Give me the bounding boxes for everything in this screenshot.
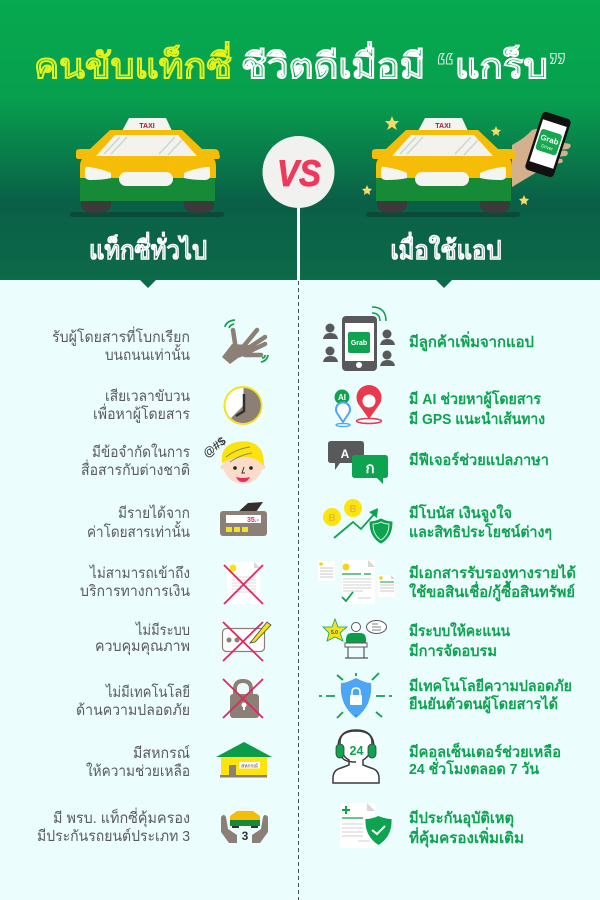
icon: taxi with app, right: Driver <box>541 143 554 152</box>
row 8 right text: มีคอลเซ็นเตอร์ช่วยเหลือ <box>409 742 561 761</box>
row 9 left text: มีประกันรถยนต์ประเภท 3 <box>37 828 190 845</box>
row 3 left text <box>81 443 190 479</box>
icon: foreign passenger face <box>200 434 266 484</box>
row 8 left text: ให้ความช่วยเหลือ <box>86 762 190 780</box>
row 5 left text: ไม่สามารถเข้าถึง <box>89 564 190 582</box>
icon: rating star and trainer: 5.0 <box>331 630 338 636</box>
row 2 right text: มี GPS แนะนำเส้นทาง <box>409 411 545 428</box>
row 6 left text: ควบคุมคุณภาพ <box>95 638 190 656</box>
row 9 right text: มีประกันอุบัติเหตุ <box>409 809 514 828</box>
VS badge <box>262 136 334 280</box>
row 5 right text <box>409 563 576 602</box>
row 5 left text <box>80 564 190 600</box>
row 7 right text: มีเทคโนโลยีความปลอดภัย <box>409 676 572 695</box>
row 4 left text: ค่าโดยสารเท่านั้น <box>87 521 190 541</box>
VS badge: VS <box>277 153 321 194</box>
title <box>34 41 567 86</box>
icon: phone with passengers <box>323 307 395 371</box>
row 1 left text <box>52 326 190 364</box>
row 8 right text <box>409 742 561 778</box>
icon: taxi with app, right <box>362 111 572 217</box>
icon: crossed-out padlock <box>223 679 263 718</box>
icon: bonus coins, growth arrow and shield: B <box>328 513 336 524</box>
icon: rating star and trainer <box>323 619 386 658</box>
icon: taxi with app, right: TAXI <box>435 123 451 130</box>
icon: foreign passenger face: @#$ <box>200 434 229 460</box>
icon: clock <box>224 387 262 424</box>
row 4 right text: และสิทธิประโยชน์ต่างๆ <box>409 522 552 541</box>
row 9 left text <box>37 807 190 845</box>
icon: income documents <box>318 560 395 604</box>
header panel <box>0 0 600 288</box>
icon: phone with passengers: Grab <box>351 340 367 347</box>
row 3 left text: มีข้อจำกัดในการ <box>92 443 190 461</box>
row 1 left text: บนถนนเท่านั้น <box>105 344 190 364</box>
icon: crossed-out document <box>224 562 263 604</box>
row 9 left text: มี พรบ. แท็กซี่คุ้มครอง <box>53 807 190 828</box>
row 4 left text <box>87 504 190 541</box>
row 9 right text: ที่คุ้มครองเพิ่มเติม <box>409 827 524 848</box>
row 3 right text: มีฟีเจอร์ช่วยแปลภาษา <box>409 451 549 469</box>
row 1 left text: รับผู้โดยสารที่โบกเรียก <box>52 326 190 346</box>
icon: taxi meter <box>220 502 267 536</box>
icon: hands protecting taxi <box>221 807 268 843</box>
row 5 right text: ใช้ขอสินเชื่อ/กู้ซื้อสินทรัพย์ <box>409 580 575 602</box>
title: ชีวิตดีเมื่อมี “แกร็บ” <box>241 41 567 86</box>
icon: bonus coins, growth arrow and shield: B <box>349 504 357 515</box>
icon: insurance document and shield <box>340 803 392 848</box>
heading: with the app: เมื่อใช้แอป <box>390 231 502 265</box>
row 7 left text: ด้านความปลอดภัย <box>76 702 190 719</box>
row 6 right text: มีระบบให้คะแนน <box>409 622 511 640</box>
row 6 left text <box>95 621 190 656</box>
icon: taxi meter: 35.- <box>247 517 260 524</box>
row 8 left text: มีสหกรณ์ <box>133 745 190 762</box>
icon: translation speech bubbles <box>328 441 388 484</box>
row 8 left text <box>86 745 190 780</box>
row 4 left text: มีรายได้จาก <box>118 504 190 522</box>
title: คนขับแท็กซี่ <box>34 41 232 86</box>
row 6 right text <box>409 622 511 660</box>
row 5 left text: บริการทางการเงิน <box>80 583 190 600</box>
icon: crossed-out rating card <box>222 622 271 661</box>
icon: hand waving <box>222 320 268 364</box>
row 4 right text: มีโบนัส เงินจูงใจ <box>409 503 512 523</box>
row 9 right text <box>409 809 524 848</box>
icon: taxi with app, right: Grab <box>539 133 560 147</box>
icon: AI and GPS pins <box>334 385 382 426</box>
row 2 left text <box>93 388 190 423</box>
icon: call-center agent <box>333 730 379 783</box>
row 8 right text: 24 ชั่วโมงตลอด 7 วัน <box>409 758 540 778</box>
row 5 right text: มีเอกสารรับรองทางรายได้ <box>409 563 576 582</box>
icon: translation speech bubbles: ก <box>365 460 375 477</box>
icon: call-center agent: 24 <box>350 744 363 758</box>
icon: cooperative building <box>216 742 272 778</box>
row 6 right text: มีการจัดอบรม <box>409 643 497 660</box>
row 2 right text <box>409 389 545 428</box>
row 7 left text: ไม่มีเทคโนโลยี <box>105 683 190 701</box>
row 7 left text <box>76 683 190 719</box>
icon: AI and GPS pins: AI <box>338 393 346 402</box>
heading: regular taxi: แท็กซี่ทั่วไป <box>89 231 207 265</box>
row 2 left text: เพื่อหาผู้โดยสาร <box>93 403 190 423</box>
row 4 right text <box>409 503 552 541</box>
icon: translation speech bubbles: A <box>341 447 350 461</box>
row 7 right text: ยืนยันตัวตนผู้โดยสารได้ <box>409 694 558 714</box>
row 3 left text: สื่อสารกับต่างชาติ <box>81 459 190 479</box>
row 1 right text: มีลูกค้าเพิ่มจากแอป <box>409 331 534 352</box>
center dashed divider <box>298 281 300 900</box>
icon: bonus coins, growth arrow and shield <box>323 499 392 543</box>
row 7 right text <box>409 676 572 714</box>
icon: taxi, left <box>70 118 224 217</box>
icon: taxi, left: TAXI <box>139 123 155 130</box>
icon: cooperative building: สหกรณ์ <box>241 762 258 770</box>
row 2 left text: เสียเวลาขับวน <box>105 388 190 405</box>
row 6 left text: ไม่มีระบบ <box>135 621 190 639</box>
icon: hands protecting taxi: 3 <box>242 829 249 843</box>
icon: security shield <box>319 673 392 718</box>
row 2 right text: มี AI ช่วยหาผู้โดยสาร <box>409 389 542 409</box>
